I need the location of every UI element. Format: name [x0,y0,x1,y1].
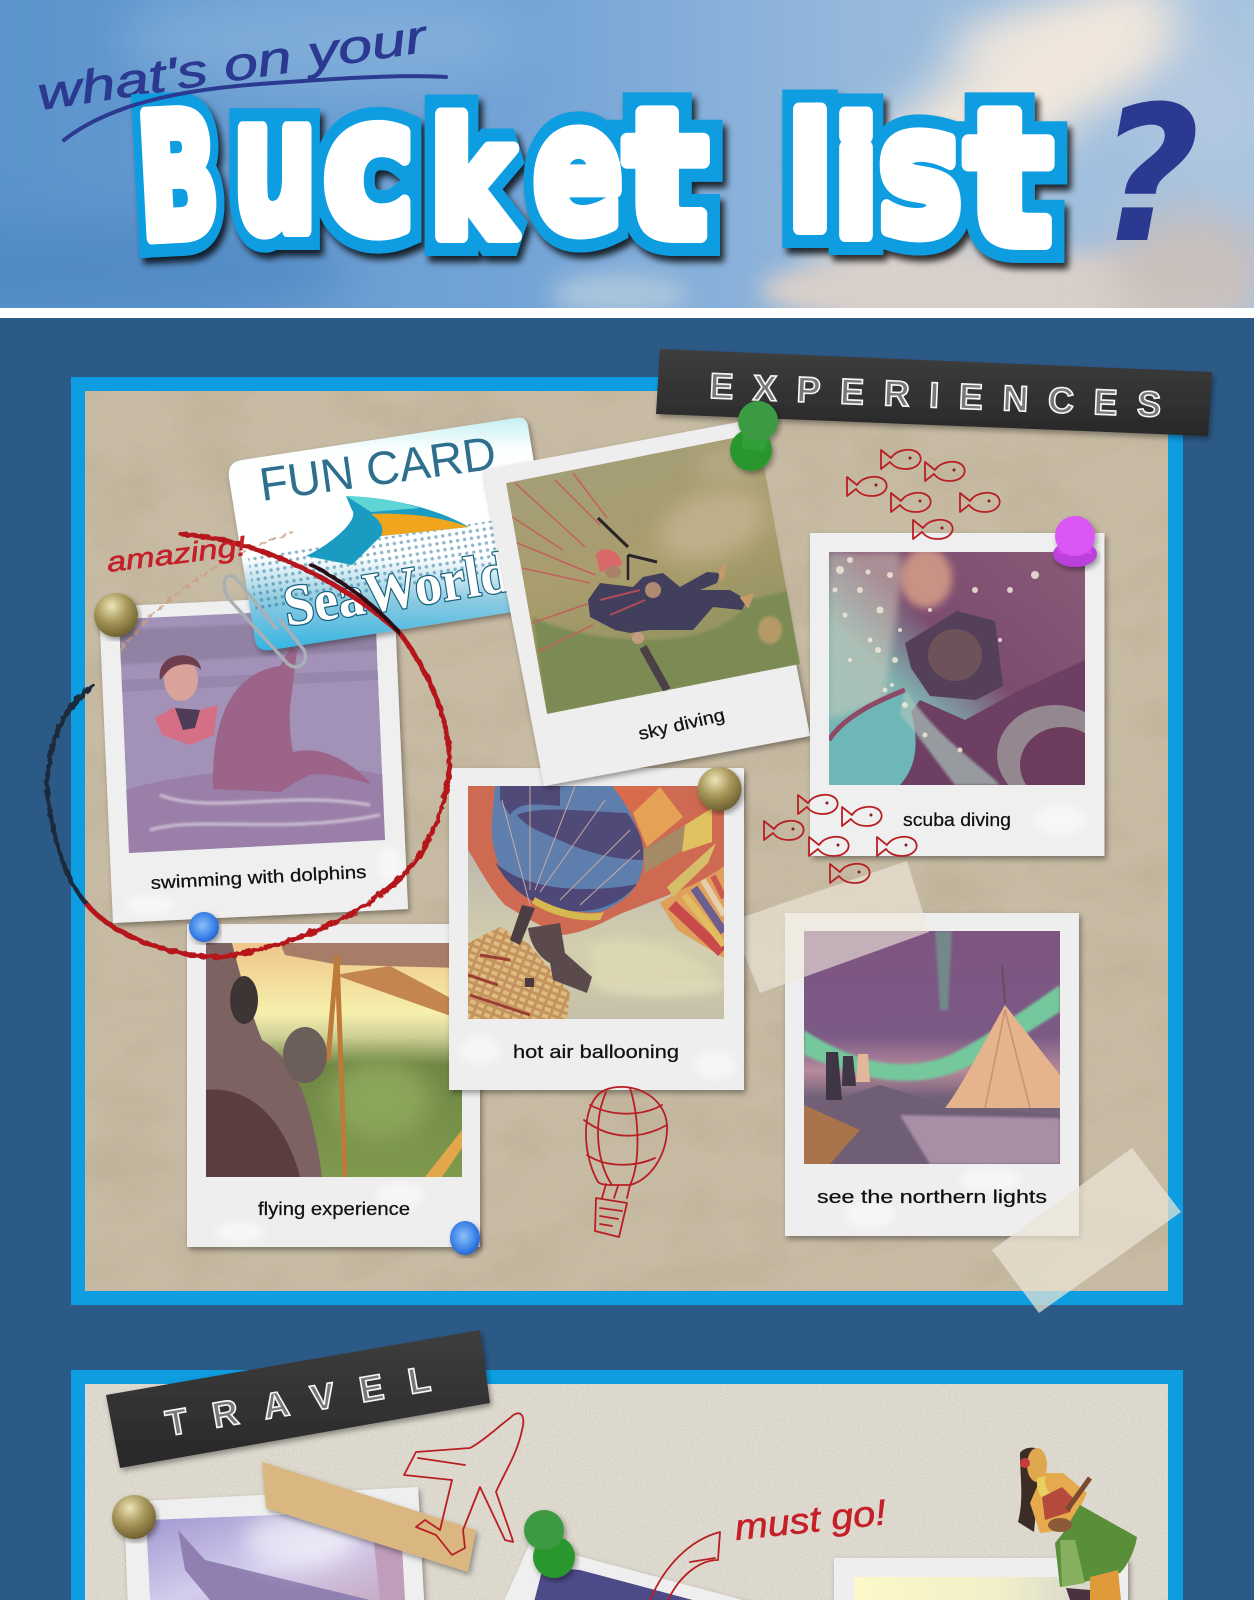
tape: masking tape [262,1462,476,1572]
title: Bucket list outline: e [533,67,623,272]
title: underline swoosh [64,76,446,140]
caption: see the northern lights [817,1168,1047,1229]
label: experiences [656,349,1212,436]
polaroid: flying experience [187,924,480,1247]
title: Bucket list outline: s [878,70,962,275]
caption: hot air ballooning: hot air ballooning [513,1042,679,1062]
photo: balloons [468,786,725,1019]
title: what's on your: what's on your [34,10,431,120]
label: experiences: EXPERIENCES [709,365,1162,425]
card logo: swoosh [306,496,469,565]
polaroid: see the northern lights [785,913,1079,1236]
photo: bright beach [854,1577,1118,1600]
caption: hot air ballooning [460,1036,735,1079]
title: Bucket list: t [625,73,707,278]
title: Bucket list outline [133,57,1052,287]
polaroid: scuba diving [810,533,1113,856]
title: Bucket list [133,57,1052,287]
caption: scuba diving: scuba diving [903,810,1011,830]
photo: aurora and tipi [804,931,1072,1164]
balloon pilot [528,923,592,993]
doodle: hot air balloon [584,1087,667,1237]
title: Bucket list: s [878,70,962,275]
polaroid: swimming with dolphins [99,593,408,923]
photo: tandem paraglider [506,433,800,714]
small balloon [660,865,724,958]
pin: magenta, scuba [1053,516,1097,567]
pin: green, travel [524,1510,575,1578]
caption: swimming with dolphins: swimming with dolphins [150,862,367,893]
title: Bucket list: k [430,87,517,274]
pin: brass, dolphins [94,593,138,637]
doodle: fish school top [847,450,1000,539]
pin: brass, balloon [698,767,742,811]
card: SeaWorld fun card [229,418,557,650]
panel: experiences [71,377,1183,1313]
polaroid: sky diving [483,420,810,786]
title: Bucket list outline: l [788,83,832,265]
photo: woman and dolphin [115,607,385,855]
title: Bucket list: B [133,77,223,279]
title: Bucket list: t [966,70,1052,287]
polaroid: travel second [500,1543,780,1600]
title: Bucket list outline: c [323,58,415,275]
title: Bucket list: i [834,86,878,273]
card text: SeaWorld: SeaWorld [279,539,514,639]
photo: airplane wing [146,1510,405,1600]
card text: FUN CARD: FUN CARD [256,426,499,511]
title: Bucket list outline: B [133,77,223,279]
title: question mark: ? [1098,66,1200,285]
label: travel: TRAVEL [162,1358,433,1444]
caption: sky diving: sky diving [636,705,727,744]
photo: dusk scene [534,1567,700,1600]
pin: brass, travel [112,1495,156,1539]
title: Bucket list: e [533,67,623,272]
photo: cockpit view [206,943,462,1177]
doodle: fish school bottom [764,795,917,883]
pin: blue, flying [450,1221,480,1255]
title: Bucket list outline: t [966,70,1052,287]
basket [468,927,570,1019]
tape: northern lights bottom [992,1148,1181,1313]
pin: blue, dolphins [189,912,219,942]
annotation: must go!: must go! [733,1491,888,1548]
pin: green, sky diving [730,401,778,471]
big balloon envelope [468,786,724,935]
label: travel [106,1330,490,1468]
panel: travel [71,1330,1183,1600]
arrow: must go doodle [650,1532,720,1600]
title: Bucket list: u [233,57,317,274]
icon: paper clip [224,576,306,667]
polaroid: travel first [124,1487,424,1600]
polaroid: travel third [834,1558,1128,1600]
title: Bucket list: l [788,83,832,265]
caption: flying experience [215,1183,424,1242]
doodle: airplane [404,1413,523,1555]
tape: northern lights top [731,861,929,993]
title: Bucket list: c [323,58,415,275]
caption: see the northern lights: see the northern lights [817,1187,1047,1207]
caption: flying experience: flying experience [258,1199,410,1219]
figure: hula girl [1018,1448,1137,1600]
title: Bucket list outline: t [625,73,707,278]
caption: swimming with dolphins [125,847,402,915]
doodle: red chalk circle [47,532,449,957]
annotation: amazing!: amazing! [105,530,248,578]
caption: scuba diving [903,805,1085,835]
title: Bucket list outline: k [430,87,517,274]
header: sky banner [0,0,1254,330]
photo: diver underwater [829,552,1085,785]
title: Bucket list outline: i [834,86,878,273]
polaroid: hot air ballooning [449,768,744,1090]
title: Bucket list outline: u [233,57,317,274]
